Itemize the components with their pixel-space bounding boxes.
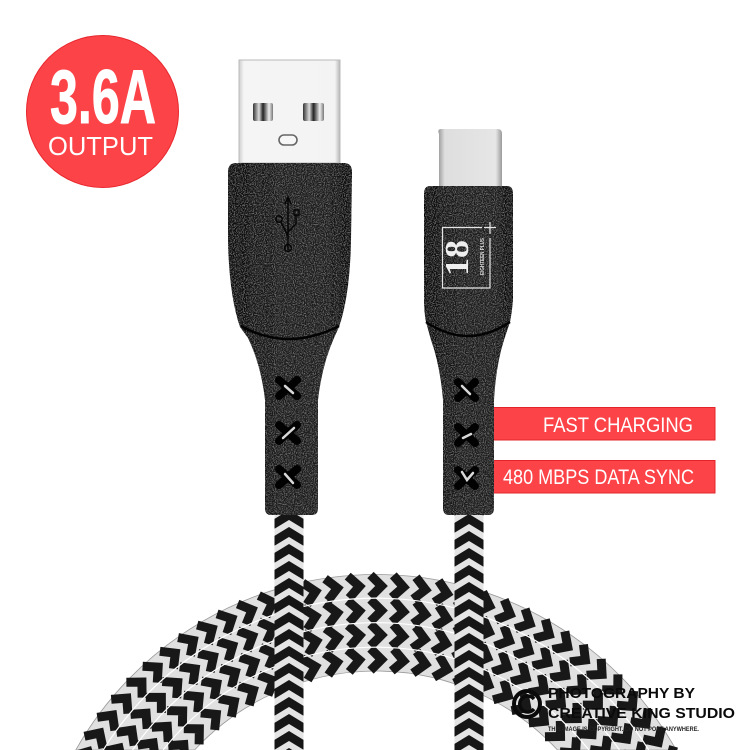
cap seam xyxy=(426,322,510,336)
metal shell xyxy=(438,129,502,187)
badge: 3.6A output: 3.6A xyxy=(50,55,156,140)
logo: 18 eighteen plus: 18 xyxy=(439,240,476,276)
metal shell xyxy=(239,60,340,163)
watermark: CREATIVE KING STUDIO xyxy=(548,705,735,722)
black housing xyxy=(424,186,513,515)
chevron weave xyxy=(73,575,679,750)
stitches xyxy=(458,382,475,486)
coiled braided cable xyxy=(73,574,679,750)
cap seam xyxy=(241,326,339,339)
black housing xyxy=(228,163,352,515)
icon: usb trident xyxy=(276,197,299,251)
watermark: PHOTOGRAPHY BY xyxy=(548,685,695,702)
badge: 3.6A output xyxy=(26,36,178,188)
badge: 3.6A output: OUTPUT xyxy=(48,131,153,161)
watermark: THIS IMAGE IS COPYRIGHT. DO NOT POST ANYWHERE. xyxy=(548,726,699,733)
oval slot xyxy=(279,135,297,145)
USB-A connector xyxy=(228,60,352,515)
label: fast charging xyxy=(490,408,715,440)
watermark xyxy=(514,685,735,733)
left vertical braided cable xyxy=(274,510,304,750)
icon: copyright xyxy=(514,691,540,717)
contact window left xyxy=(253,103,273,121)
USB-C connector xyxy=(424,129,513,515)
cable band base xyxy=(76,574,676,750)
label: data sync: 480 MBPS DATA SYNC xyxy=(503,466,694,489)
label: data sync xyxy=(490,460,715,493)
contact window right xyxy=(303,103,324,121)
strand separators xyxy=(103,598,649,750)
logo: 18 eighteen plus: EIGHTEEN PLUS xyxy=(480,238,486,275)
stitches xyxy=(279,380,297,485)
right vertical braided cable xyxy=(454,510,484,750)
logo: 18 eighteen plus xyxy=(439,222,496,288)
label: fast charging: FAST CHARGING xyxy=(543,414,693,437)
